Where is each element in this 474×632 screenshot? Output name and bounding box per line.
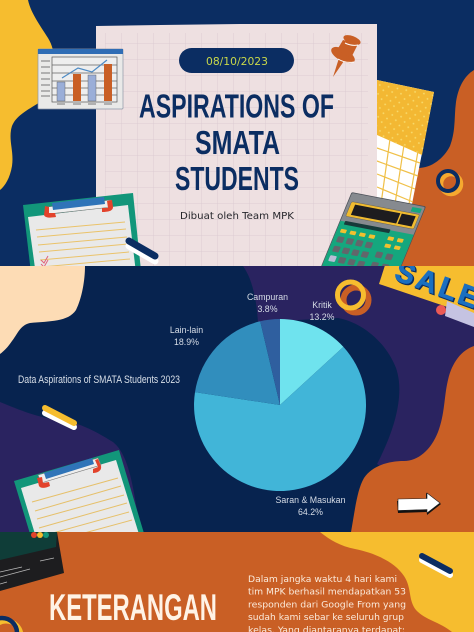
marker icon <box>422 556 450 575</box>
peach blob <box>0 266 85 354</box>
orange blob right <box>400 70 474 266</box>
purple background shape right <box>243 266 474 466</box>
date pill: 08/10/2023 <box>206 55 268 68</box>
heading: keterangan: KETERANGAN <box>49 587 217 628</box>
title <box>140 94 334 190</box>
purple background shape left <box>0 402 140 532</box>
ring icon bottom-left <box>0 618 21 632</box>
label: Campuran: 3.8% <box>257 304 278 314</box>
orange blob <box>351 346 474 532</box>
label: Lain-lain: Lain-lain <box>170 325 203 335</box>
icon: bar chart window <box>38 49 123 109</box>
note paper with dots and grid <box>377 80 434 204</box>
icon: marker <box>129 241 155 261</box>
label: Saran & Masukan: 64.2% <box>298 507 323 517</box>
chart title: Data Aspirations of SMATA Students 2023 <box>18 374 180 386</box>
clipboard icon <box>14 450 144 532</box>
credit card <box>0 532 64 591</box>
panel: cover slide <box>0 0 474 290</box>
date pill <box>179 48 294 73</box>
icon: clipboard <box>23 193 140 266</box>
label: Kritik: Kritik <box>312 300 332 310</box>
title: SMATA <box>195 124 280 161</box>
description paragraph: tim MPK berhasil mendapatkan 53 <box>248 586 406 598</box>
ring icon <box>338 282 368 312</box>
yellow blob <box>320 532 474 632</box>
ring icon right <box>438 171 461 194</box>
title: STUDENTS <box>175 160 299 197</box>
arrow icon <box>397 493 441 515</box>
eraser icon <box>45 408 74 427</box>
label: Lain-lain: 18.9% <box>174 337 199 347</box>
subtitle: Dibuat oleh Team MPK <box>180 211 295 222</box>
panel: keterangan slide <box>0 532 474 632</box>
label: Campuran: Campuran <box>247 292 288 302</box>
slice: Campuran 3.8% <box>260 319 280 405</box>
description paragraph: responden dari Google From yang <box>248 600 406 610</box>
description paragraph <box>248 574 406 632</box>
icon: push pin <box>331 35 361 77</box>
slice: Kritik 13.2% <box>280 319 343 405</box>
panel: pie chart slide <box>0 266 474 532</box>
yellow blob left <box>0 0 54 190</box>
pie chart <box>194 319 366 491</box>
description paragraph: sudah kami sebar ke seluruh grup <box>248 612 404 623</box>
label: Saran & Masukan: Saran & Masukan <box>276 495 346 505</box>
sale sign <box>379 266 474 327</box>
description paragraph: Dalam jangka waktu 4 hari kami <box>248 574 397 585</box>
label: Kritik: 13.2% <box>310 312 335 322</box>
title: ASPIRATIONS OF <box>139 88 334 124</box>
icon: calculator <box>321 192 426 266</box>
slice: Saran & Masukan 64.2% <box>194 347 366 491</box>
graph paper sheet <box>96 24 377 266</box>
slice: Lain-lain 18.9% <box>195 321 280 405</box>
